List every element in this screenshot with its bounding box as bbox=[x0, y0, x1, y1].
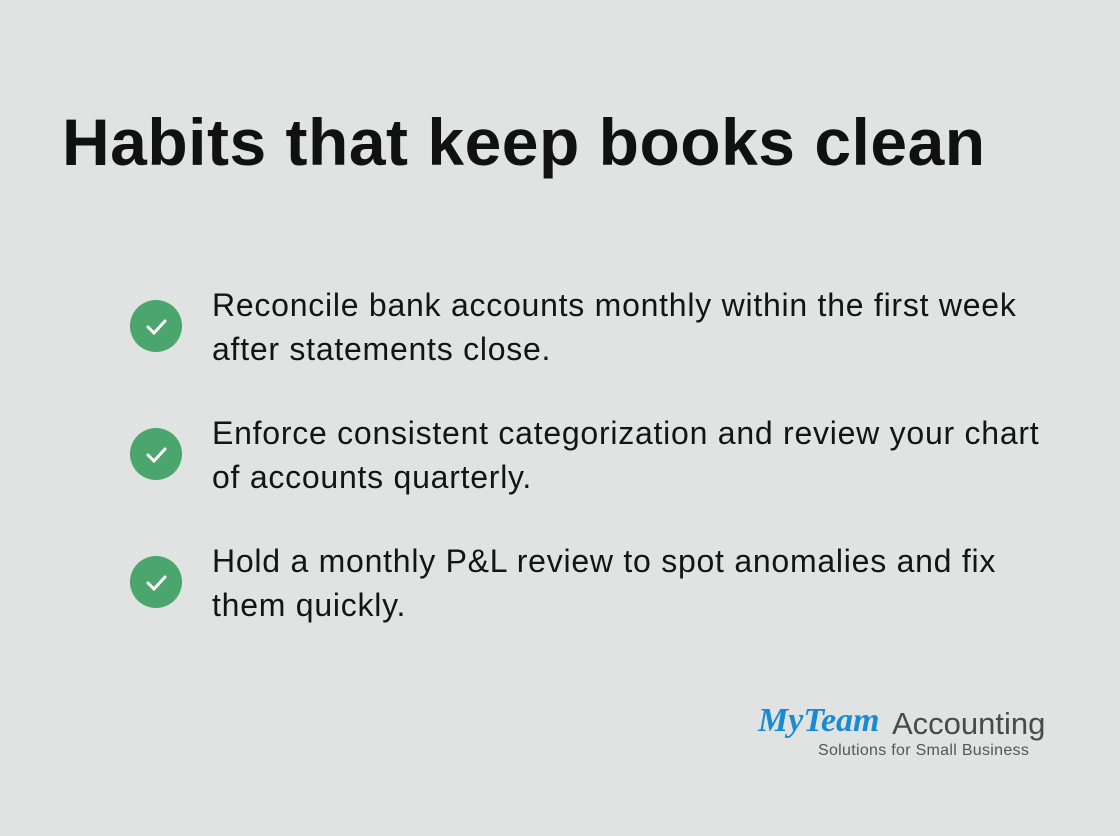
item 2 bbox=[130, 415, 1039, 495]
text 1: after statements close. bbox=[212, 331, 551, 367]
logo: Accounting bbox=[892, 706, 1045, 741]
title: Habits that keep books clean bbox=[62, 105, 986, 179]
item 1 bbox=[130, 287, 1017, 367]
item 3 bbox=[130, 543, 996, 623]
icon: check bbox=[130, 556, 182, 608]
logo: MyTeam bbox=[758, 702, 880, 739]
text 3 bbox=[212, 543, 996, 623]
logo bbox=[758, 702, 1045, 759]
text 1 bbox=[212, 287, 1017, 367]
icon: check bbox=[130, 300, 182, 352]
icon: check bbox=[130, 428, 182, 480]
logo: Solutions for Small Business bbox=[818, 742, 1029, 759]
text 3: Hold a monthly P&L review to spot anomalies and fix bbox=[212, 543, 996, 579]
text 2: Enforce consistent categorization and review your chart bbox=[212, 415, 1039, 451]
text 1: Reconcile bank accounts monthly within the first week bbox=[212, 287, 1017, 323]
text 2 bbox=[212, 415, 1039, 495]
text 2: of accounts quarterly. bbox=[212, 459, 532, 495]
text 3: them quickly. bbox=[212, 587, 406, 623]
